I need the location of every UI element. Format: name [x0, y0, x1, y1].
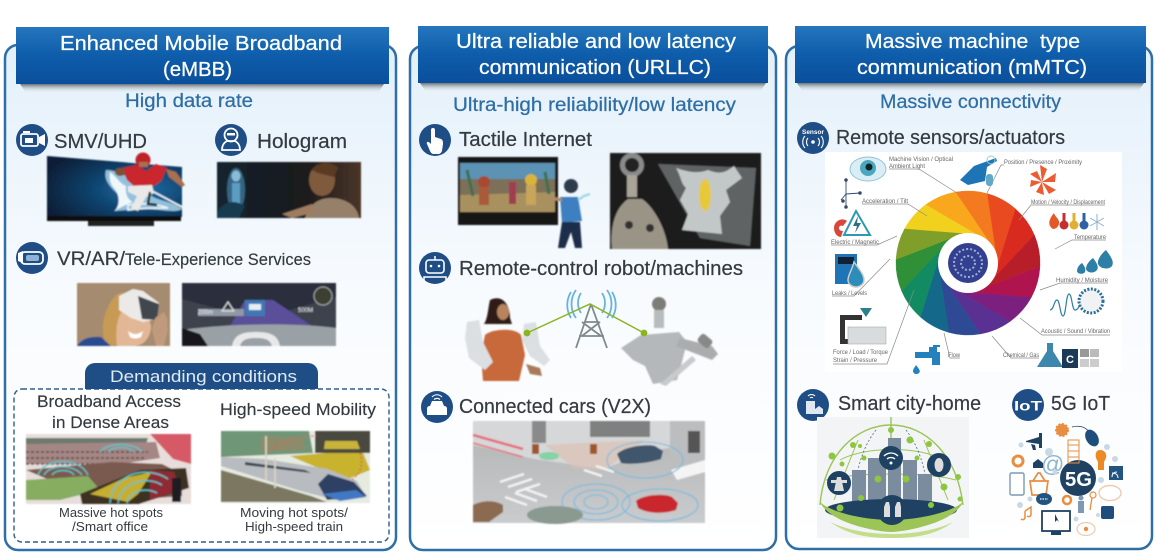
icon: clamp [840, 308, 886, 344]
label: connected cars: Connected cars (V2X) [459, 396, 651, 418]
icon: video camera [16, 124, 48, 156]
icon: sensor [797, 122, 829, 154]
chat [1036, 493, 1052, 505]
tablet [1010, 473, 1024, 495]
icon: IoT [1012, 389, 1044, 421]
label: SMV/UHD: SMV/UHD [54, 131, 147, 153]
icon: fan [1030, 165, 1056, 195]
image: person using game screen [458, 157, 590, 248]
megaphone [1026, 433, 1042, 450]
sensor labels: Flow [948, 352, 960, 359]
label: broadband access in dense areas: in Dense Areas [52, 413, 169, 432]
image: woman wearing VR headset [77, 283, 170, 346]
sensor labels: Strain / Pressure [833, 357, 877, 364]
image: car head-up display: 200m [198, 310, 213, 316]
image: hologram scene [217, 162, 361, 218]
label: VR/AR/Tele-Experience Services: Tele-Experience Services [125, 251, 311, 269]
icon: faucet [913, 345, 940, 374]
square [1101, 506, 1114, 519]
caption: massive hot spots: /Smart office [72, 519, 148, 534]
icon: barrel and drop [835, 254, 864, 287]
speech bubble [1099, 486, 1121, 500]
sensor labels: Leaks / Levels [832, 290, 868, 297]
sensor labels: Temperature [1074, 234, 1106, 241]
basket [1030, 473, 1048, 495]
label: VR/AR/Tele-Experience Services [57, 249, 311, 270]
illustration: 5G IoT cloud: 5G [1065, 469, 1092, 491]
at sign: @ [1041, 451, 1064, 477]
icon: flask and elements [1037, 343, 1099, 368]
icon: water drops [1077, 250, 1113, 274]
dashed box: demanding conditions [14, 363, 389, 542]
icon: robot [419, 252, 451, 284]
server [1068, 440, 1079, 463]
illustration: 5G IoT cloud [1010, 424, 1123, 536]
icon: magnet and warning [834, 211, 870, 237]
sensor leader lines [831, 165, 1110, 364]
caption: moving hot spots: High-speed train [245, 519, 343, 534]
tab: demanding conditions: Demanding conditions [110, 367, 297, 386]
icon: smart home [797, 389, 829, 421]
icon: VR headset [16, 242, 48, 274]
sensor labels: Ambient Light [889, 163, 925, 170]
diagram: sensor colour wheel [825, 152, 1122, 374]
caption: moving hot spots: Moving hot spots/ [240, 505, 348, 520]
gear [1056, 424, 1068, 436]
sensor labels: Chemical / Gas [1003, 352, 1040, 359]
image: high-speed train [221, 431, 370, 503]
heading: eMBB: Enhanced Mobile Broadband [60, 33, 342, 55]
panel: eMBB [5, 27, 396, 550]
sensor labels: Electric / Magnetic [831, 239, 880, 246]
sensor labels: Force / Load / Torque [833, 349, 888, 356]
mouse [1072, 426, 1090, 433]
robot [621, 297, 718, 386]
subheading: high data rate: High data rate [125, 91, 253, 112]
sensor labels: Position / Presence / Proximity [1004, 159, 1083, 166]
image: street intersection [473, 421, 705, 524]
label: smart city-home: Smart city-home [838, 393, 981, 415]
label: high-speed mobility: High-speed Mobility [220, 400, 377, 419]
person [1078, 496, 1084, 513]
icon: eye [850, 157, 886, 181]
icon: sensor: Sensor [802, 129, 824, 136]
label: tactile internet: Tactile Internet [459, 129, 592, 151]
heading: mMTC [795, 26, 1146, 83]
sensor labels: Motion / Velocity / Displacement [1031, 199, 1105, 206]
icon: connected car [421, 391, 453, 423]
colour wheel [890, 186, 1046, 340]
sensor labels: Humidity / Moisture [1056, 277, 1108, 284]
heading: eMBB [16, 27, 389, 84]
rss [1109, 466, 1123, 480]
image: car head-up display [182, 283, 336, 346]
label: broadband access in dense areas [37, 392, 181, 432]
small dots [1017, 442, 1118, 522]
subheading: ultra-high reliability: Ultra-high reliability/low latency [453, 95, 737, 116]
heading: mMTC: Massive machine type [865, 31, 1080, 53]
icon: touch hand [419, 124, 451, 156]
subheading: massive connectivity: Massive connectivity [880, 92, 1062, 113]
gear small [1063, 496, 1071, 504]
label: 5G IoT: 5G IoT [1051, 393, 1110, 415]
label: remote sensors: Remote sensors/actuators [836, 127, 1065, 149]
icon: axes [841, 179, 861, 208]
label: hologram: Hologram [257, 131, 347, 153]
heading: eMBB: (eMBB) [163, 59, 232, 81]
image: android with medical display [610, 153, 761, 249]
illustration: teleoperated robot [465, 290, 718, 386]
panel: mMTC [786, 26, 1152, 549]
label: remote-control robot: Remote-control robot/machines [459, 258, 743, 280]
image: television with football player [47, 152, 185, 226]
heading: URLLC [418, 26, 768, 83]
panel: URLLC [410, 26, 776, 550]
image: stadium hot spots [26, 434, 191, 504]
caption: moving hot spots [240, 505, 348, 534]
sensor labels [831, 156, 1110, 364]
heading: URLLC: Ultra reliable and low latency [456, 31, 736, 53]
key [1090, 492, 1096, 510]
image: car head-up display: 500M [298, 308, 313, 314]
icon: pointing hand [960, 156, 997, 186]
illustration: smart city dome [817, 417, 969, 538]
tab: demanding conditions [85, 363, 318, 389]
monitor [1042, 511, 1070, 535]
caption: massive hot spots [59, 505, 163, 534]
operator in exoskeleton [465, 298, 550, 381]
gear left [1013, 456, 1023, 466]
sensor labels: Machine Vision / Optical [889, 156, 954, 163]
label: broadband access in dense areas: Broadband Access [37, 392, 181, 411]
icon: hologram person [215, 124, 247, 156]
house [1033, 459, 1043, 468]
green link lines [524, 304, 647, 336]
icon: IoT: IoT [1014, 398, 1043, 414]
sensor labels: Acceleration / Tilt [862, 198, 908, 205]
heart bubble [1077, 522, 1095, 536]
music note [1021, 507, 1031, 520]
label: VR/AR/Tele-Experience Services: VR/AR/ [57, 249, 126, 270]
icon: thermometers [1049, 213, 1104, 230]
icon: flask and elements: C [1066, 354, 1074, 366]
heading: mMTC: communication (mMTC) [857, 57, 1087, 79]
caption: massive hot spots: Massive hot spots [59, 505, 163, 520]
sensor labels: Acoustic / Sound / Vibration [1041, 328, 1110, 335]
bulb [1096, 450, 1106, 470]
icon: sound wave and urchin [1050, 289, 1103, 316]
cell tower with signal waves [567, 290, 616, 348]
heading: URLLC: communication (URLLC) [479, 57, 711, 79]
